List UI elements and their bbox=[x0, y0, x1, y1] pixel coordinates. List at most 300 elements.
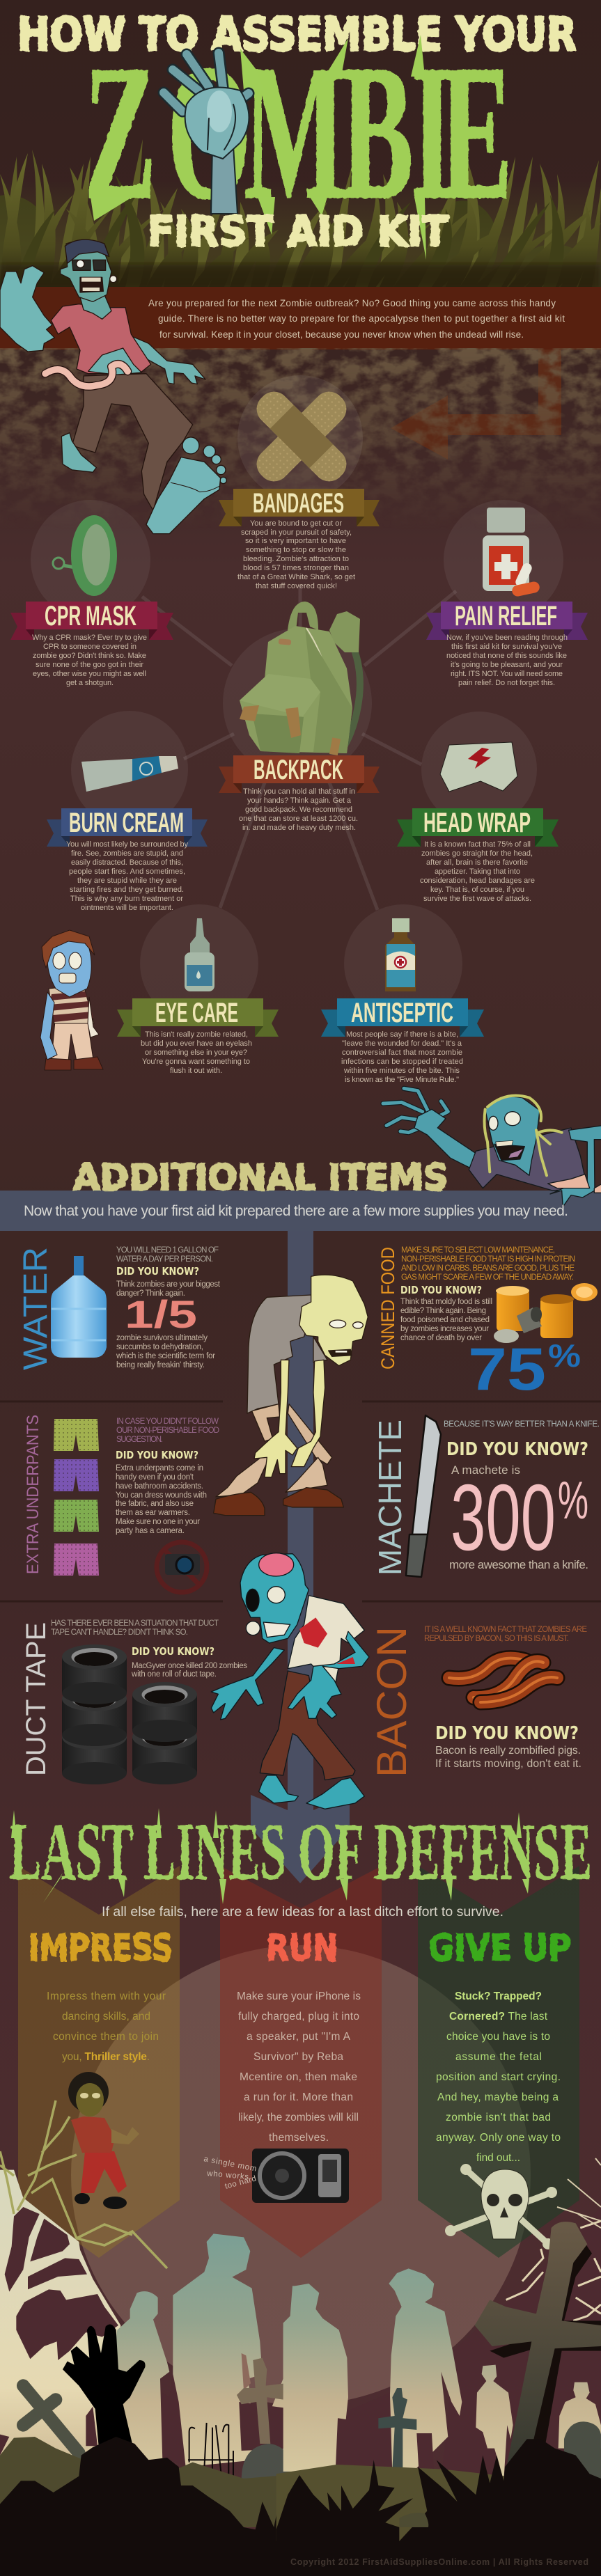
head wrap text: survive the first wave of attacks. bbox=[423, 895, 531, 903]
burn text: people start fires. And sometimes, bbox=[69, 867, 185, 876]
machete text bbox=[444, 1420, 600, 1571]
zombie right arm bbox=[132, 336, 205, 384]
icon: no camera bbox=[157, 1542, 207, 1592]
fence bbox=[188, 2423, 233, 2481]
give up text: Cornered? The last bbox=[449, 2011, 548, 2023]
backpack text bbox=[239, 787, 358, 832]
icon: skull and bones bbox=[445, 2164, 557, 2249]
bandages text: blood is 57 times stronger than bbox=[243, 564, 349, 572]
icon: cans bbox=[494, 1283, 598, 1343]
canned food text: Think that moldy food is still bbox=[400, 1298, 492, 1306]
give up text bbox=[436, 1990, 561, 2164]
water text: danger? Think again. bbox=[116, 1289, 185, 1298]
burn text: starting fires and they get burned. bbox=[70, 886, 184, 894]
water text bbox=[116, 1246, 221, 1369]
dirt texture bbox=[0, 348, 601, 498]
zombie silhouette far left bbox=[114, 2291, 169, 2460]
zombie eyeball bbox=[110, 276, 117, 283]
zombie: kid zombie bbox=[40, 930, 103, 1070]
underpants text: IN CASE YOU DIDN'T FOLLOW bbox=[116, 1417, 219, 1426]
duct tape fact: MacGyver once killed 200 zombies bbox=[132, 1662, 247, 1670]
banner bbox=[219, 755, 380, 793]
kid hair bbox=[42, 930, 95, 968]
cpr text: zombie goo? Didn't think so. Make bbox=[33, 652, 146, 660]
blood bbox=[299, 1617, 327, 1648]
heading: additional items: ADDITIONAL ITEMS bbox=[73, 1157, 448, 1199]
banner bbox=[397, 808, 559, 847]
bandages circle bbox=[237, 375, 363, 501]
give up text: Stuck? Trapped? bbox=[455, 1990, 542, 2002]
bandages text: that of a Great White Shark, so get bbox=[237, 573, 355, 581]
bandages text bbox=[237, 519, 355, 590]
pain text: Now, if you've been reading through bbox=[446, 634, 568, 642]
head wrap text: zombies go straight for the head, bbox=[421, 849, 533, 858]
exposed brain bbox=[259, 1553, 294, 1576]
machete text: BECAUSE IT'S WAY BETTER THAN A KNIFE. bbox=[444, 1420, 600, 1429]
canned food text: by zombies increases your bbox=[400, 1325, 489, 1333]
kid shirt bbox=[49, 985, 94, 1023]
give up text: And hey, maybe being a bbox=[437, 2091, 559, 2103]
panel dividers bbox=[0, 1401, 601, 1601]
duct tape fact: DID YOU KNOW? bbox=[132, 1645, 214, 1658]
panel: extra underpants bbox=[24, 1415, 219, 1592]
water text: 1/5 bbox=[125, 1292, 197, 1336]
underpants text: handy even if you don't bbox=[116, 1473, 194, 1482]
burn circle bbox=[71, 711, 188, 828]
run text bbox=[237, 1990, 361, 2144]
duct tape fact: with one roll of duct tape. bbox=[131, 1670, 217, 1679]
pain text: this first aid kit for survival you've bbox=[451, 643, 562, 651]
stooped legs bbox=[252, 1404, 332, 1464]
pain text: right. ITS NOT. You will need some bbox=[451, 670, 563, 678]
cpr text: Why a CPR mask? Ever try to give bbox=[32, 634, 147, 642]
maroon trunks bbox=[334, 2393, 392, 2472]
caption: a single mom: too hard bbox=[224, 2174, 257, 2191]
crawler mouth bbox=[494, 1144, 524, 1161]
canned food text: edible? Think again. Being bbox=[400, 1307, 486, 1315]
underpants text: You can dress wounds with bbox=[116, 1491, 207, 1500]
zombie silhouette third bbox=[251, 2286, 299, 2460]
bandages text: that stuff covered quick! bbox=[256, 582, 337, 590]
kid eyes bbox=[53, 952, 65, 969]
dark mound bbox=[0, 2437, 299, 2576]
dark ground and grass bbox=[276, 2439, 601, 2576]
cpr text: eyes, other wise you might as well bbox=[33, 670, 146, 678]
small cross bbox=[237, 2358, 291, 2444]
intro band bbox=[0, 287, 601, 350]
grass field bbox=[0, 139, 601, 292]
head wrap circle bbox=[421, 712, 537, 827]
stooped arms bbox=[254, 1360, 297, 1477]
canned food text: GAS MIGHT SCARE A FEW OF THE UNDEAD AWAY. bbox=[401, 1273, 574, 1282]
fallen cross bbox=[23, 2386, 79, 2453]
zombie neck bbox=[80, 294, 111, 319]
zombie glasses bbox=[72, 260, 106, 270]
bacon label: BACON bbox=[368, 1626, 415, 1777]
antiseptic text: within five minutes of the bite. This bbox=[343, 1067, 460, 1075]
bacon text: IT IS A WELL KNOWN FACT THAT ZOMBIES ARE bbox=[424, 1626, 587, 1634]
cpr text: sure none of the goo got in their bbox=[36, 661, 143, 669]
underpants text: Extra underpants come in bbox=[116, 1464, 203, 1472]
item: cpr mask bbox=[10, 500, 173, 687]
antiseptic text: Most people say if there is a bite, bbox=[346, 1030, 458, 1039]
impress text: Impress them with your bbox=[47, 1990, 166, 2002]
backpack text: one that can store at least 1200 cu. bbox=[239, 815, 358, 823]
stooped eyes bbox=[329, 1320, 346, 1328]
zombie hair bbox=[65, 239, 109, 263]
icon: eye drops bbox=[185, 918, 214, 991]
grave stub bbox=[416, 2433, 434, 2474]
zombie silhouette large bbox=[173, 2233, 263, 2467]
eye care text: or something else in your eye? bbox=[145, 1049, 247, 1057]
head wrap text: key. That is, of course, if you bbox=[430, 886, 524, 894]
pain circle bbox=[444, 500, 563, 620]
eye care text bbox=[141, 1030, 252, 1075]
underpants text: DID YOU KNOW? bbox=[116, 1449, 198, 1461]
underpants label: EXTRA UNDERPANTS bbox=[24, 1415, 42, 1574]
run text: themselves. bbox=[269, 2132, 329, 2144]
underpants text: SUGGESTION. bbox=[116, 1436, 163, 1444]
water text: Think zombies are your biggest bbox=[116, 1280, 221, 1289]
cpr text: CPR to someone covered in bbox=[43, 643, 136, 651]
75 percent bbox=[468, 1336, 581, 1403]
backpack circle bbox=[223, 629, 372, 778]
underpants text: OUR NON-PERISHABLE FOOD bbox=[116, 1427, 219, 1435]
run text: Mcentire on, then make bbox=[240, 2071, 357, 2083]
big cross shadow bbox=[490, 2233, 601, 2444]
zombie: glasses zombie with intestines bbox=[0, 239, 226, 534]
antiseptic text: is known as the "Five Minute Rule." bbox=[345, 1076, 459, 1084]
item: bandages bbox=[219, 375, 380, 590]
give up text: position and start crying. bbox=[436, 2071, 561, 2083]
head wrap text: It is a known fact that 75% of all bbox=[424, 840, 531, 849]
panel: canned food bbox=[377, 1246, 598, 1403]
brain zombie eye socket bbox=[246, 1589, 259, 1611]
water text: DID YOU KNOW? bbox=[116, 1265, 199, 1278]
zombie big foot bbox=[146, 437, 226, 534]
banner: BANDAGES bbox=[253, 488, 344, 519]
crawler eyes bbox=[489, 1116, 498, 1130]
item: pain relief bbox=[426, 500, 588, 687]
brain zombie right arm bbox=[288, 1631, 369, 1718]
banner: BURN CREAM bbox=[69, 808, 184, 838]
trunks behind small cross bbox=[239, 2402, 297, 2451]
crawler right arm bbox=[550, 1126, 601, 1207]
bandages text: so it is very important to have bbox=[245, 537, 346, 545]
impress text: convince them to join bbox=[53, 2031, 159, 2043]
pain text: pain relief. Do not forget this. bbox=[458, 679, 555, 687]
zombie left hand bbox=[0, 266, 54, 352]
icon: tape rolls bbox=[62, 1644, 197, 1784]
burn text: ointments will be important. bbox=[81, 904, 173, 912]
banner bbox=[219, 488, 380, 526]
kid arm bbox=[40, 992, 57, 1060]
burn text: fire. See, zombies are stupid, and bbox=[71, 849, 183, 858]
canned food text: AND LOW IN CARBS. BEANS ARE GOOD, PLUS THE bbox=[401, 1264, 575, 1273]
water text: WATER A DAY PER PERSON. bbox=[116, 1255, 213, 1264]
run text: a run for it. More than bbox=[244, 2091, 353, 2103]
left tree upper branches bbox=[0, 2100, 167, 2268]
bacon fact bbox=[435, 1723, 582, 1770]
machete text: more awesome than a knife. bbox=[449, 1558, 588, 1571]
subtitle: If all else fails, here are a few ideas for a last ditch effort to survive. bbox=[102, 1904, 504, 1919]
zombie silhouette spiky bbox=[389, 2268, 462, 2474]
item: antiseptic bbox=[321, 904, 484, 1084]
head wrap text: appetizer. Taking that into bbox=[435, 867, 520, 876]
zombie pants bbox=[72, 374, 193, 510]
icon: zombie hand rising through the O bbox=[164, 53, 249, 214]
antiseptic text bbox=[341, 1030, 463, 1084]
black hand bbox=[63, 2324, 146, 2446]
give up text: zombie isn't that bad bbox=[446, 2112, 551, 2123]
banner bbox=[321, 998, 484, 1037]
banner bbox=[426, 601, 588, 640]
caption: a single mom: who works bbox=[206, 2169, 249, 2181]
head wrap text bbox=[420, 840, 535, 903]
panel: bacon bbox=[368, 1626, 587, 1777]
zombie mouth bbox=[80, 277, 103, 292]
banner: EYE CARE bbox=[155, 998, 238, 1028]
icon: speaker bbox=[252, 2149, 349, 2203]
pale sky and trunk bbox=[0, 2170, 120, 2472]
run text: Survivor" by Reba bbox=[253, 2051, 343, 2063]
olive ground bbox=[276, 2465, 506, 2541]
olive mound bbox=[0, 2437, 302, 2527]
backpack text: your hands? Think again. Get a bbox=[247, 796, 352, 805]
bandages text: You are bound to get cut or bbox=[250, 519, 342, 528]
underpants text: Make sure no one in your bbox=[116, 1518, 200, 1526]
graveyard right bbox=[276, 2207, 601, 2576]
intro text bbox=[148, 298, 565, 340]
zombie head bbox=[61, 241, 111, 301]
icon: pill bottle bbox=[483, 508, 540, 597]
banner bbox=[117, 998, 279, 1037]
run text: likely, the zombies will kill bbox=[238, 2112, 359, 2123]
brain zombie head bbox=[240, 1554, 309, 1643]
cpr text bbox=[32, 634, 147, 687]
crawler hand and arm bbox=[414, 1109, 476, 1170]
kid teeth bbox=[59, 973, 76, 983]
connector lines bbox=[142, 585, 456, 910]
canned food text: chance of death by over bbox=[400, 1334, 482, 1342]
banner: ANTISEPTIC bbox=[351, 998, 453, 1028]
duct tape text: TAPE CAN'T HANDLE? DIDN'T THINK SO. bbox=[51, 1628, 188, 1637]
title: first aid kit: FIRST AID KIT bbox=[148, 207, 448, 256]
canned food text: MAKE SURE TO SELECT LOW MAINTENANCE, bbox=[401, 1246, 555, 1255]
column: give up bbox=[428, 1927, 571, 2249]
canned food text bbox=[400, 1246, 575, 1342]
zombie: stooped zombie bbox=[214, 1275, 368, 1516]
head wrap text: after all, brain is there favorite bbox=[426, 858, 528, 867]
eye care circle bbox=[140, 904, 258, 1023]
backpack text: in. and made of heavy duty mesh. bbox=[242, 824, 356, 832]
zombie: crawling blonde zombie bbox=[383, 1088, 601, 1207]
icon: thriller figure bbox=[68, 2072, 139, 2209]
tombstone right bbox=[564, 2421, 601, 2483]
water text: zombie survivors ultimately bbox=[116, 1334, 208, 1342]
kid pants bbox=[52, 1013, 93, 1061]
give up heading: GIVE UP bbox=[428, 1927, 571, 1970]
icon: water jug bbox=[51, 1256, 107, 1358]
impress heading: IMPRESS bbox=[29, 1927, 173, 1970]
canned food text: DID YOU KNOW? bbox=[400, 1284, 482, 1296]
crawler fingers bbox=[383, 1088, 448, 1133]
icon: backpack bbox=[240, 602, 360, 755]
run text: fully charged, plug it into bbox=[238, 2011, 359, 2023]
give up text: anyway. Only one way to bbox=[436, 2132, 561, 2144]
tombstone bbox=[242, 2444, 295, 2481]
intro text: guide. There is no better way to prepare for the apocalypse then to put together a first aid kit bbox=[158, 313, 565, 324]
head wrap text: consideration, head bandages are bbox=[420, 877, 535, 885]
backpack text: Think you can hold all that stuff in bbox=[243, 787, 355, 796]
impress text bbox=[47, 1990, 166, 2063]
eye care text: This isn't really zombie related, bbox=[145, 1030, 248, 1039]
machete label: MACHETE bbox=[372, 1420, 408, 1576]
bacon fact: Bacon is really zombified pigs. bbox=[435, 1745, 581, 1757]
duct tape label: DUCT TAPE bbox=[21, 1622, 52, 1776]
crawler shirt bbox=[469, 1128, 587, 1191]
run text: Make sure your iPhone is bbox=[237, 1990, 361, 2002]
crawler head bbox=[485, 1097, 540, 1175]
duct tape text: HAS THERE EVER BEEN A SITUATION THAT DUCT bbox=[51, 1619, 219, 1628]
title: zombie with drips: ZOMBIE bbox=[84, 25, 513, 239]
bandages text: scraped in your pursuit of safety, bbox=[241, 528, 352, 537]
zombie small foot bbox=[61, 433, 96, 472]
olive patch bbox=[399, 2513, 428, 2527]
run heading: RUN bbox=[266, 1927, 338, 1970]
icon: antiseptic bottle bbox=[385, 918, 416, 991]
crawler hair bbox=[485, 1096, 562, 1175]
banner: HEAD WRAP bbox=[423, 808, 531, 838]
water label: WATER bbox=[17, 1247, 54, 1370]
backpack text: good backpack. We recommend bbox=[245, 806, 352, 814]
tree gaps bbox=[0, 2207, 218, 2467]
kid head bbox=[47, 938, 91, 997]
antiseptic text: controversial fact that most zombie bbox=[342, 1049, 462, 1057]
water text: YOU WILL NEED 1 GALLON OF bbox=[116, 1246, 219, 1255]
pain text: noticed that none of this sounds like bbox=[446, 652, 567, 660]
underpants text: party has a camera. bbox=[116, 1527, 185, 1535]
give up text: find out... bbox=[476, 2152, 520, 2164]
small cross bbox=[378, 2388, 416, 2469]
cpr circle bbox=[31, 500, 150, 620]
machete text: A machete is bbox=[451, 1463, 520, 1477]
column: run bbox=[203, 1927, 361, 2203]
water text: being really freakin' thirsty. bbox=[116, 1361, 205, 1369]
panel: duct tape bbox=[21, 1619, 247, 1784]
intestines bbox=[45, 364, 127, 386]
icon: crossed bandages bbox=[250, 385, 353, 488]
antiseptic circle bbox=[344, 904, 462, 1023]
underpants text bbox=[116, 1417, 219, 1535]
bacon text: REPULSED BY BACON, SO THIS IS A MUST. bbox=[424, 1635, 569, 1643]
band text: Now that you have your first aid kit prepared there are a few more supplies you may need. bbox=[24, 1203, 568, 1219]
caption: a single mom: a single mom bbox=[203, 2155, 257, 2174]
caption: a single mom bbox=[203, 2155, 257, 2191]
duct tape fact bbox=[131, 1645, 247, 1679]
pain text bbox=[446, 634, 568, 687]
banner bbox=[47, 808, 208, 847]
crawler guts bbox=[548, 1175, 590, 1188]
brain zombie pants bbox=[260, 1671, 355, 1780]
bacon fact: DID YOU KNOW? bbox=[435, 1723, 579, 1744]
brain zombie eye bbox=[267, 1587, 285, 1603]
bacon fact: If it starts moving, don't eat it. bbox=[435, 1758, 582, 1770]
banner panels bbox=[18, 1866, 579, 2258]
brain zombie shirt bbox=[288, 1596, 364, 1690]
burn text bbox=[66, 840, 188, 912]
panel: machete bbox=[372, 1415, 600, 1577]
item: burn cream bbox=[47, 711, 208, 912]
moon bbox=[71, 1945, 531, 2405]
zombie silhouette small bbox=[476, 2365, 513, 2481]
underpants text: them as ear warmers. bbox=[116, 1509, 190, 1517]
canned food text: NON-PERISHABLE FOOD THAT IS HIGH IN PROTEIN bbox=[401, 1255, 575, 1264]
give up text: choice you have is to bbox=[446, 2031, 550, 2043]
hanging eyeball bbox=[246, 1621, 260, 1635]
75 percent: 75 bbox=[468, 1336, 546, 1403]
bacon text bbox=[424, 1626, 587, 1643]
additional items band bbox=[0, 1191, 601, 1231]
zombie shirt bbox=[51, 304, 151, 374]
intro text: for survival. Keep it in your closet, because you never know when the undead will rise. bbox=[159, 329, 524, 340]
burn text: they are stupid while they are bbox=[77, 877, 177, 885]
icon: cpr mask bbox=[53, 515, 117, 596]
icon: head wrap bbox=[440, 742, 517, 792]
burn text: This is why any burn treatment or bbox=[70, 895, 183, 903]
75 percent: % bbox=[548, 1337, 581, 1374]
right tree branches bbox=[506, 2221, 601, 2320]
impress text: dancing skills, and bbox=[62, 2011, 150, 2023]
run text: a speaker, put "I'm A bbox=[247, 2031, 351, 2043]
center stripe and arrow bbox=[251, 1231, 350, 1883]
icon: bacon strips bbox=[449, 1658, 557, 1702]
panel: water bbox=[17, 1246, 221, 1370]
arrow: red path into kit bbox=[391, 350, 561, 460]
item: eye care bbox=[117, 904, 279, 1075]
item: head wrap bbox=[397, 712, 559, 903]
give up text: assume the fetal bbox=[455, 2051, 542, 2063]
eye care text: but did you ever have an eyelash bbox=[141, 1039, 252, 1048]
right tree upper branches bbox=[557, 2158, 601, 2228]
pain text: it's going to be pleasant, and your bbox=[451, 661, 563, 669]
eye care text: flush it out with. bbox=[170, 1067, 222, 1075]
stooped mouth bbox=[329, 1349, 352, 1356]
stooped shoes bbox=[214, 1488, 343, 1516]
brain zombie feet bbox=[259, 1775, 364, 1809]
graveyard left bbox=[0, 2170, 302, 2576]
water text: succumbs to dehydration, bbox=[116, 1343, 203, 1351]
intro text: Are you prepared for the next Zombie outbreak? No? Good thing you came across this handy bbox=[148, 298, 556, 308]
canned food label: CANNED FOOD bbox=[377, 1247, 398, 1369]
brain zombie teeth bbox=[263, 1622, 290, 1638]
burn text: easily distracted. Because of this, bbox=[71, 858, 183, 867]
icon: tube bbox=[81, 756, 178, 792]
stooped shirt bbox=[247, 1295, 327, 1413]
water text: which is the scientific term for bbox=[116, 1352, 215, 1360]
underpants text: have bathroom accidents. bbox=[116, 1482, 203, 1491]
impress text: you, Thriller style. bbox=[62, 2051, 150, 2063]
stooped head bbox=[299, 1275, 368, 1366]
canned food text: food poisoned and chased bbox=[400, 1316, 490, 1324]
copyright: Copyright 2012 FirstAidSuppliesOnline.com | All Rights Reserved bbox=[290, 2557, 588, 2567]
kid shoes bbox=[45, 1057, 103, 1070]
antiseptic text: infections can be stopped if treated bbox=[341, 1058, 463, 1066]
zombie: brain zombie bbox=[211, 1553, 369, 1809]
zombie belly bbox=[88, 348, 141, 375]
brain zombie left arm bbox=[211, 1648, 284, 1720]
banner: CPR MASK bbox=[45, 601, 136, 631]
